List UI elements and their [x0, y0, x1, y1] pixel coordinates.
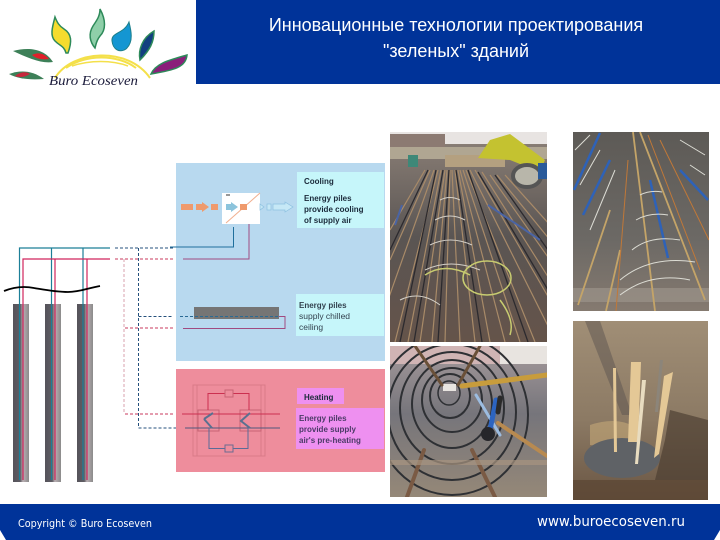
label: heating — [297, 388, 344, 404]
title: "зеленых" зданий — [383, 41, 529, 61]
title: Инновационные технологии проектирования — [269, 15, 643, 35]
header band — [196, 0, 720, 84]
air flow arrows: cool — [260, 202, 293, 212]
logo leaf: navy — [140, 31, 154, 60]
logo: Buro Ecoseven — [9, 9, 187, 89]
air flow arrows: warm — [181, 202, 218, 212]
photo: pile head with protruding pipes — [573, 321, 708, 500]
chilled ceiling — [180, 307, 285, 328]
label: heating: Heating — [304, 393, 333, 402]
photo: rebar cages on site — [388, 132, 550, 342]
logo leaf: lower red — [9, 71, 44, 79]
logo wordmark: Buro Ecoseven — [49, 74, 138, 89]
label: cooling — [297, 172, 384, 228]
pile 3 — [77, 304, 93, 482]
label: chilled ceiling — [296, 294, 384, 336]
heat exchanger schematic — [182, 385, 280, 456]
diagram: energy piles — [4, 248, 110, 482]
label: pre-heating: Energy piles — [299, 414, 347, 423]
label: cooling: of supply air — [304, 216, 352, 225]
label: chilled ceiling: supply chilled — [299, 311, 350, 321]
label: pre-heating: air's pre-heating — [299, 436, 361, 445]
break line — [4, 286, 100, 292]
label: cooling: Cooling — [304, 177, 334, 186]
logo leaf: blue drop — [112, 22, 131, 51]
footer band — [0, 504, 720, 540]
photo: rebar rows with blue pipes — [573, 132, 709, 311]
logo leaf: red — [13, 49, 53, 62]
footer website: www.buroecoseven.ru — [537, 514, 685, 530]
return pipes: red — [23, 259, 110, 480]
label: chilled ceiling: ceiling — [299, 322, 323, 332]
logo sun arcs — [55, 55, 150, 78]
cooling pipes — [170, 227, 234, 247]
logo leaf: yellow — [52, 17, 71, 53]
label: chilled ceiling: Energy piles — [299, 301, 347, 310]
pile 2 — [45, 304, 61, 482]
title — [269, 15, 643, 61]
label: cooling: provide cooling — [304, 205, 364, 214]
label: pre-heating: provide supply — [299, 425, 356, 434]
dashed connectors — [115, 248, 176, 428]
label: cooling: Energy piles — [304, 194, 352, 203]
panel: heating — [176, 369, 385, 472]
logo leaf: purple — [151, 55, 187, 74]
photo: inside rebar cage — [390, 346, 547, 497]
supply pipes: blue — [20, 248, 110, 480]
footer copyright: Copyright © Buro Ecoseven — [18, 518, 152, 530]
air handler box — [222, 193, 260, 224]
label: pre-heating — [296, 408, 384, 449]
pile 1 — [13, 304, 29, 482]
logo leaf: green — [90, 9, 104, 48]
panel: cooling — [170, 163, 385, 361]
